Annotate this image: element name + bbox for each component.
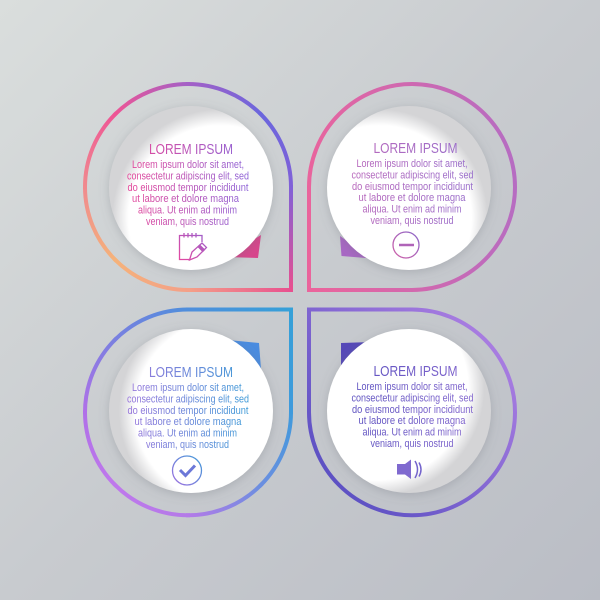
- body text: [352, 381, 474, 450]
- body text: [127, 382, 249, 451]
- ring: bottom-right outline: [309, 309, 515, 515]
- body text: ut labore et dolore magna: [358, 192, 466, 204]
- body text: aliqua. Ut enim ad minim: [362, 427, 462, 439]
- body text: Lorem ipsum dolor sit amet,: [356, 381, 468, 393]
- folded tab: [340, 236, 372, 258]
- body text: ut labore et dolore magna: [132, 193, 240, 205]
- panel: bottom-right teardrop: [309, 309, 515, 515]
- icon: speaker: [397, 460, 421, 479]
- icon: check in circle: [172, 456, 202, 485]
- folded tab: [225, 235, 261, 258]
- heading: LOREM IPSUM: [149, 142, 233, 158]
- body text: consectetur adipiscing elit, sed: [352, 392, 474, 404]
- white circle: [109, 329, 273, 493]
- body text: do eiusmod tempor incididunt: [352, 181, 473, 193]
- heading: LOREM IPSUM: [374, 364, 458, 380]
- body text: [127, 159, 249, 228]
- body text: veniam, quis nostrud: [146, 216, 229, 228]
- body text: veniam, quis nostrud: [146, 439, 229, 451]
- body text: [352, 158, 474, 227]
- panel: top-right teardrop: [309, 84, 515, 290]
- heading: LOREM IPSUM: [149, 365, 233, 381]
- body text: Lorem ipsum dolor sit amet,: [132, 382, 244, 394]
- body text: consectetur adipiscing elit, sed: [127, 170, 249, 182]
- body text: do eiusmod tempor incididunt: [352, 404, 473, 416]
- icon: notepad and pencil: [180, 233, 206, 260]
- body text: veniam, quis nostrud: [370, 438, 454, 450]
- body text: consectetur adipiscing elit, sed: [127, 393, 249, 405]
- body text: ut labore et dolore magna: [134, 416, 242, 428]
- body text: consectetur adipiscing elit, sed: [352, 169, 474, 181]
- ring: top-left outline: [85, 84, 291, 290]
- panel: bottom-left teardrop: [85, 309, 291, 515]
- white circle: [109, 106, 273, 270]
- ring: top-right outline: [309, 84, 515, 290]
- folded tab: [341, 342, 372, 372]
- body text: veniam, quis nostrud: [370, 215, 454, 227]
- icon: minus in circle: [393, 232, 419, 258]
- body text: Lorem ipsum dolor sit amet,: [132, 159, 244, 171]
- ring: bottom-left outline: [85, 309, 291, 515]
- body text: aliqua. Ut enim ad minim: [138, 205, 237, 217]
- heading: LOREM IPSUM: [374, 141, 458, 157]
- white circle: [327, 329, 491, 493]
- body text: ut labore et dolore magna: [358, 415, 466, 427]
- body text: Lorem ipsum dolor sit amet,: [356, 158, 468, 170]
- panel: top-left teardrop: [85, 84, 291, 290]
- body text: aliqua. Ut enim ad minim: [362, 204, 462, 216]
- body text: do eiusmod tempor incididunt: [128, 182, 248, 194]
- body text: do eiusmod tempor incididunt: [128, 405, 248, 417]
- folded tab: [228, 340, 261, 369]
- white circle: [327, 106, 491, 270]
- body text: aliqua. Ut enim ad minim: [138, 428, 237, 440]
